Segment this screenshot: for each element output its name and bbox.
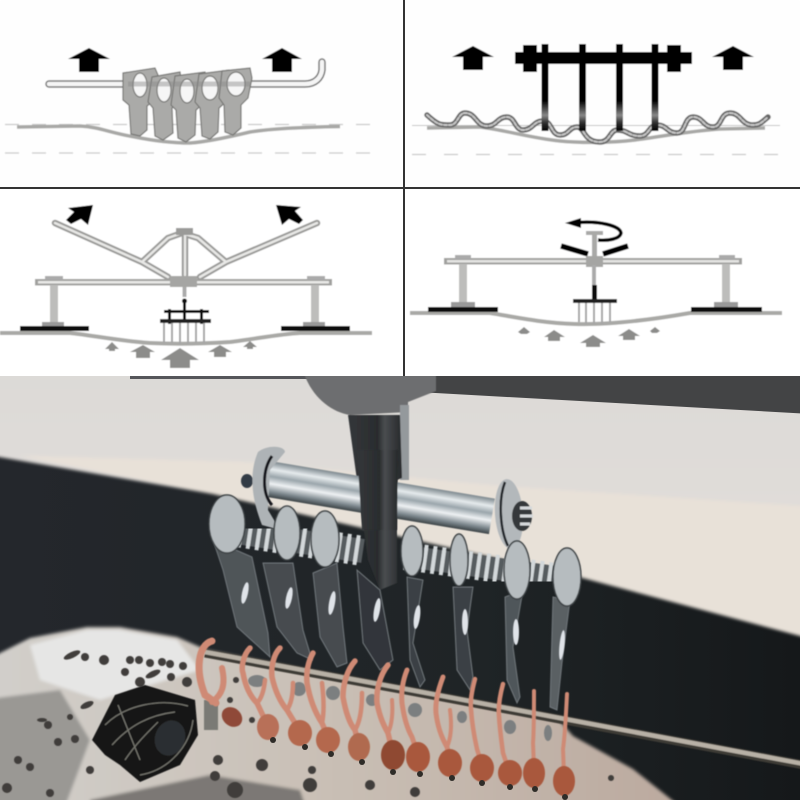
lever arms: [55, 223, 317, 277]
post behind hook: [204, 700, 218, 730]
handle wings: [561, 246, 628, 254]
panel: screw bridge puller: [405, 190, 800, 376]
key tabs: [123, 68, 252, 142]
photo: dent puller on car body: [0, 360, 800, 800]
screw top: [586, 231, 603, 260]
hook rod: [49, 62, 322, 84]
left foot: [428, 264, 498, 312]
reference lines: [412, 124, 780, 126]
axle: [241, 447, 533, 550]
crossbar: [35, 276, 332, 287]
arrow: left up: [68, 48, 110, 72]
glue blobs: [218, 703, 575, 796]
dented sheet: [0, 333, 372, 344]
top block: [176, 228, 193, 235]
dented sheet: [427, 127, 765, 142]
wall: [0, 360, 800, 644]
black scribble patch: [92, 685, 198, 782]
tool head: [573, 265, 617, 324]
tool head: [160, 287, 211, 344]
crossbar: [444, 255, 742, 267]
arrow: right up: [262, 48, 302, 72]
blades: [213, 540, 570, 710]
dashed reference lines: [5, 124, 372, 153]
dented sheet: [17, 126, 340, 143]
panel: glue tabs with sliding bar: [405, 0, 800, 188]
panel dividers: [0, 0, 800, 376]
dented sheet: [410, 313, 782, 324]
rod passing through tabs: [128, 82, 250, 86]
wavy tabs: [427, 113, 768, 142]
panel: lever bridge puller: [0, 190, 404, 376]
rotation arrow: [565, 218, 621, 240]
arrow: right up: [712, 46, 754, 70]
hook rod: [205, 652, 800, 768]
pull stems: [542, 44, 658, 131]
upward force arrows: [105, 341, 257, 368]
left foot: [20, 285, 89, 331]
slide hammer bar: [515, 45, 692, 72]
right foot: [281, 285, 350, 331]
dark rail: [430, 376, 800, 414]
filler speckles: [2, 648, 614, 798]
force arrows: [518, 327, 660, 347]
blade slots: [240, 582, 566, 660]
arrow: upper right: [276, 205, 303, 225]
blade top discs: [209, 495, 581, 606]
panel: keyed tabs lifted on a hook rod: [0, 0, 404, 188]
arrow: upper left: [66, 205, 93, 225]
hub and stem: [303, 370, 436, 590]
small tab feet under rod: [248, 675, 552, 741]
right foot: [691, 264, 762, 312]
springs: [230, 531, 570, 579]
arrow: left up: [452, 46, 494, 70]
copper hooks: [199, 641, 567, 775]
stem overlay on axle: [357, 450, 398, 530]
blob feet: [270, 737, 568, 800]
body panel with filler: [0, 627, 690, 800]
